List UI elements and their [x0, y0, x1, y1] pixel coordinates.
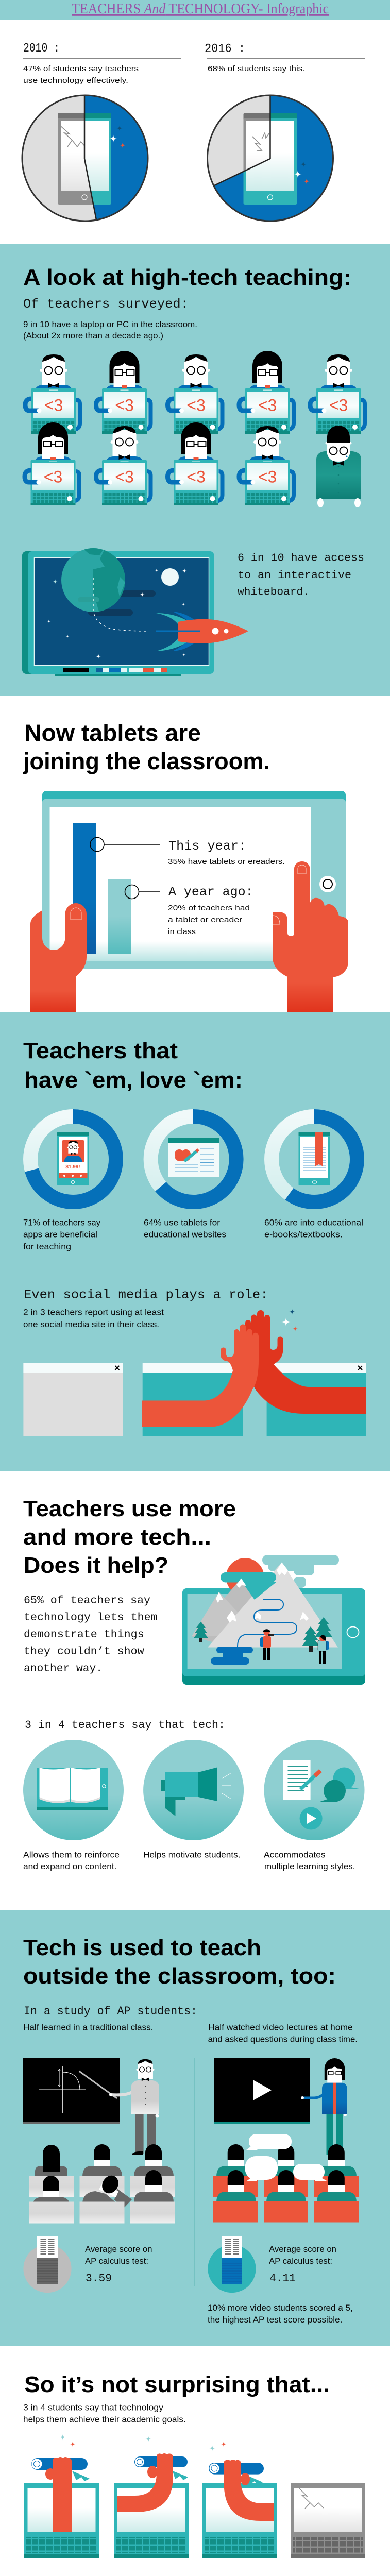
captions: Allows them to reinforce [23, 1851, 120, 1860]
heading: Tech is used to teach [23, 1935, 261, 1960]
caption: e-books/textbooks. [264, 1230, 343, 1240]
browser window: blank [23, 1363, 123, 1436]
chart: 2016 phone pie [206, 93, 335, 224]
text: video: Half watched video lectures at home [208, 2023, 353, 2032]
heading: A look at high-tech teaching: [23, 265, 351, 290]
teacher 7 [96, 426, 150, 505]
captions: multiple learning styles. [264, 1862, 355, 1871]
illustration: phone with mountain scene [182, 1555, 365, 1685]
teacher without laptop [316, 426, 361, 507]
heading: joining the classroom. [23, 748, 270, 774]
teacher 4 [239, 351, 294, 434]
illustration: right hand [273, 861, 348, 1013]
panel: tablets [0, 696, 390, 1013]
text: traditional: Half learned in a traditional class. [23, 2023, 153, 2032]
heading: have `em, love `em: [24, 1067, 243, 1093]
text: video score: AP calculus test: [269, 2257, 332, 2266]
illustration: flipped classroom [213, 2058, 359, 2223]
bar: a year ago [108, 879, 131, 954]
caption: 71% of teachers say [23, 1218, 101, 1227]
icon: app tablet: $1.99! [65, 1164, 80, 1170]
text: whiteboard stat: to an interactive [238, 569, 351, 582]
teacher 3: <3 [186, 396, 206, 415]
illustration: left arm [142, 1324, 259, 1427]
icon circle: book [23, 1740, 124, 1840]
text: laptop stat [23, 320, 197, 341]
text: laptop stat: 9 in 10 have a laptop or PC in the classroom. [23, 320, 197, 329]
text: 65% stat: technology lets them [24, 1612, 158, 1624]
text: 65% stat: demonstrate things [24, 1629, 144, 1641]
label: a year ago: A year ago: [168, 885, 253, 900]
label: a year ago: in class [168, 927, 196, 936]
text: 65% stat: they couldn’t show [24, 1646, 144, 1658]
illustration: tablet with bar chart [42, 791, 346, 969]
teacher 9 [239, 426, 294, 505]
text: 2010 stat: use technology effectively. [23, 76, 128, 85]
caption [23, 1218, 101, 1251]
icon: e-reader [299, 1132, 330, 1185]
captions [23, 1851, 355, 1871]
text: traditional score: Average score on [85, 2245, 152, 2254]
text: 65% stat [24, 1595, 158, 1675]
teacher 2 [96, 351, 150, 434]
text: traditional score [85, 2245, 152, 2285]
teacher 3 [168, 354, 223, 434]
heading: Does it help? [24, 1553, 168, 1578]
text: video score: 4.11 [269, 2272, 296, 2285]
text: 2010 stat: 47% of students say teachers [23, 64, 139, 73]
text: traditional score: 3.59 [86, 2272, 112, 2285]
teacher 6 [25, 422, 79, 505]
students: back row [35, 2144, 174, 2177]
illustration: laptop 3 diploma [202, 2460, 277, 2558]
icon: video score [208, 2236, 256, 2293]
panel: outside the classroom [0, 1910, 390, 2346]
heading: Teachers that [23, 1038, 178, 1063]
text: 2010 stat [23, 64, 139, 85]
teacher 7: <3 [115, 468, 134, 486]
caption: 60% are into educational [264, 1218, 363, 1227]
callout: a year ago [125, 885, 160, 899]
text: 3 in 4 students: 3 in 4 students say that technology [23, 2403, 164, 2413]
illustration: right arm [245, 1310, 366, 1414]
label: a year ago: 20% of teachers had [168, 904, 250, 912]
teacher 5 [310, 354, 365, 434]
caption: 64% use tablets for [144, 1218, 221, 1227]
text: highest score note: 10% more video students scored a 5, [208, 2303, 353, 2313]
text: whiteboard stat: 6 in 10 have access [238, 552, 364, 565]
captions: Accommodates [264, 1851, 326, 1860]
heading: Teachers use more [23, 1496, 236, 1521]
donut chart: 71% apps [23, 1116, 116, 1251]
heading [23, 1935, 336, 1989]
panel: high-tech teaching [0, 244, 390, 696]
students: front row [33, 2170, 174, 2208]
heading: 2016: 2016 : [205, 42, 245, 56]
panel: teachers love tablets [0, 1012, 390, 1471]
speech bubbles [245, 2134, 328, 2181]
donut chart: 64% websites [144, 1116, 236, 1240]
illustration: traditional classroom [23, 2058, 175, 2224]
students: front row [216, 2170, 357, 2202]
title: TEACHERS And TECHNOLOGY- Infographic [72, 1, 329, 17]
heading: 2010: 2010 : [23, 42, 60, 56]
caption [144, 1218, 226, 1240]
teacher 4: <3 [258, 396, 277, 415]
heading: outside the classroom, too: [23, 1963, 336, 1989]
heading: and more tech... [23, 1524, 211, 1550]
teacher 9: <3 [258, 468, 277, 486]
teacher 2: <3 [115, 396, 134, 415]
chart: 2010 phone pie [21, 93, 149, 224]
students: back row [216, 2144, 357, 2177]
heading [23, 720, 270, 774]
text: highest score note: the highest AP test score possible. [208, 2315, 342, 2325]
caption [264, 1218, 363, 1240]
caption: for teaching [23, 1242, 71, 1251]
label: this year: This year: [168, 839, 246, 854]
caption: apps are beneficial [23, 1230, 97, 1240]
text: social media stat [23, 1308, 164, 1329]
browser windows: high five [142, 1309, 366, 1436]
text: whiteboard stat: whiteboard. [238, 586, 310, 599]
teacher 1: <3 [44, 396, 63, 415]
heading: So it’s not surprising that... [24, 2372, 330, 2397]
icon circle: megaphone [143, 1740, 244, 1840]
subheading: 3 in 4: 3 in 4 teachers say that tech: [25, 1719, 225, 1732]
text: social media stat: one social media site in their class. [23, 1320, 159, 1329]
teacher 8: <3 [186, 468, 206, 486]
callout: this year [90, 838, 160, 851]
panel: 2010 vs 2016 [22, 43, 365, 222]
text: highest score note [208, 2303, 353, 2325]
text: traditional score: AP calculus test: [85, 2257, 148, 2266]
caption: educational websites [144, 1230, 226, 1240]
bar: this year [73, 823, 96, 954]
subheading: Of teachers surveyed: [23, 297, 189, 312]
captions: and expand on content. [23, 1862, 116, 1871]
heading [23, 1496, 236, 1578]
text: 65% stat: another way. [24, 1663, 103, 1675]
teacher 1 [25, 354, 80, 434]
illustration: left hand [30, 903, 87, 1013]
heading [23, 1038, 243, 1093]
text: 3 in 4 students: helps them achieve their academic goals. [23, 2415, 186, 2424]
label: a year ago: a tablet or ereader [168, 916, 242, 924]
text: video: and asked questions during class time. [208, 2035, 358, 2044]
label: this year: 35% have tablets or ereaders. [168, 857, 285, 866]
text: laptop stat: (About 2x more than a decade ago.) [23, 331, 163, 341]
subheading: social media: Even social media plays a role: [24, 1287, 268, 1302]
figure: hiker with binoculars [260, 1629, 274, 1660]
icon: app tablet [57, 1132, 89, 1185]
panel: not surprising [0, 2346, 390, 2576]
illustration: laptop 4 broken [291, 2483, 365, 2558]
section: header band [0, 0, 390, 20]
teacher 6: <3 [44, 468, 62, 486]
icon: traditional score [23, 2236, 72, 2293]
label: this year [168, 839, 285, 866]
sparkles [60, 2434, 226, 2451]
icon: web page [168, 1138, 219, 1177]
illustration: interactive whiteboard and rocket [22, 546, 248, 676]
text: 3 in 4 students [23, 2403, 186, 2424]
icon circle: learning styles [264, 1740, 365, 1840]
captions: Helps motivate students. [143, 1851, 240, 1860]
text: whiteboard stat [238, 552, 364, 599]
text: video score: Average score on [269, 2245, 336, 2254]
illustration: laptop 2 diploma [114, 2453, 189, 2558]
label: a year ago [168, 885, 253, 936]
text: 65% stat: 65% of teachers say [24, 1595, 150, 1607]
text: video score [269, 2245, 336, 2285]
text: social media stat: 2 in 3 teachers report using at least [23, 1308, 164, 1317]
panel: does tech help [0, 1471, 390, 1910]
figure: hiker [318, 1635, 329, 1664]
heading: Now tablets are [24, 720, 201, 746]
subheading: In a study of AP students: [24, 2005, 197, 2018]
illustration: laptop 1 diploma [24, 2457, 99, 2558]
text: video [208, 2023, 358, 2044]
teacher 5: <3 [329, 396, 348, 415]
text: 2016 stat: 68% of students say this. [208, 64, 305, 73]
pictogram: ten teachers [25, 351, 365, 507]
donut chart: 60% e-books [264, 1116, 363, 1240]
teacher 8 [168, 422, 223, 505]
